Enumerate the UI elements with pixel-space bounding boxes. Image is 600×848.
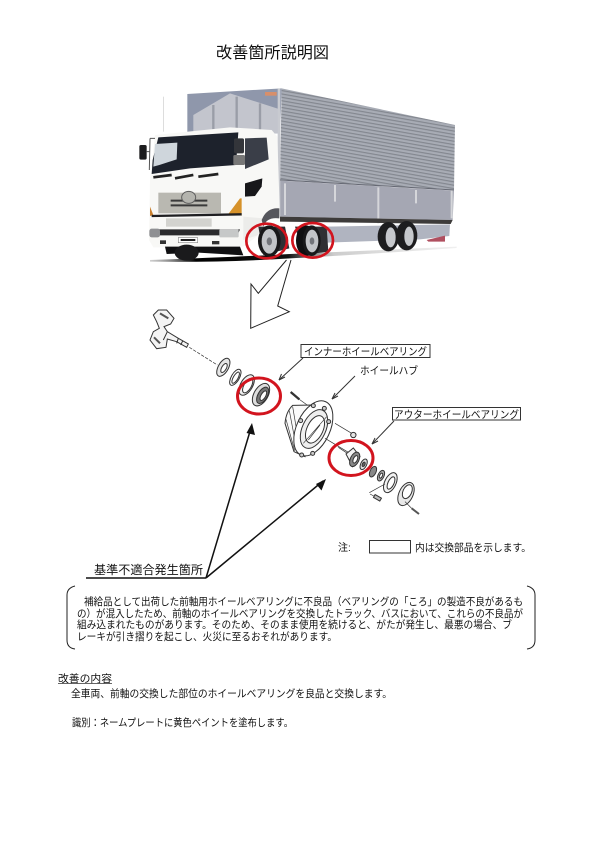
arrow: wheel hub [332, 376, 355, 399]
callout: non-conformity location [86, 423, 326, 578]
red circle: front axle 1 [246, 224, 287, 258]
explanation text: 組み込まれたものがあります。そのため、そのまま使用を続けると、がたが発生し、最悪の場合、ブ [77, 618, 512, 631]
text: identification: 識別：ネームプレートに黄色ペイントを塗布します。 [72, 716, 293, 729]
ground shadow [150, 247, 457, 262]
amber marker [228, 198, 242, 216]
label: wheel hub: ホイールハブ [360, 364, 418, 377]
note legend: 内は交換部品を示します。 [415, 541, 531, 554]
cab [139, 127, 280, 247]
explanation text: 補給品として出荷した前軸用ホイールベアリングに不良品（ベアリングの「ころ」の製造不良があるも [84, 595, 523, 608]
headlamps [149, 229, 160, 237]
exploded view: hub and outer parts [285, 392, 419, 514]
bracket: right [527, 586, 535, 649]
seal ring [227, 368, 243, 387]
door vent [245, 178, 262, 197]
inner race [236, 372, 258, 398]
note legend [338, 540, 531, 554]
windscreen [152, 132, 238, 174]
text: improvement: 全車両、前軸の交換した部位のホイールベアリングを良品と交換します。 [71, 687, 392, 700]
front lower chassis and wheel [165, 247, 243, 255]
door window [245, 138, 269, 169]
heading: improvement details: 改善の内容 [58, 672, 113, 685]
gasket [381, 471, 400, 495]
red circle: inner bearing [238, 378, 280, 414]
vents [153, 174, 218, 178]
title: 改善箇所説明図 [216, 44, 329, 62]
red circle: outer bearing [329, 440, 373, 476]
mast [162, 97, 164, 132]
cargo box side louvers [280, 88, 455, 190]
washer [359, 458, 369, 471]
stud line and nut [335, 423, 352, 433]
explanation text [77, 595, 523, 643]
arrow: outer label [372, 421, 394, 444]
cap bolt [405, 502, 412, 508]
hollow arrow from truck to diagram [251, 260, 291, 328]
red circle: front axle 2 [292, 223, 333, 258]
stud bolt [291, 392, 299, 399]
rear wheels [378, 221, 417, 251]
exploded view: knuckle and inner parts [150, 310, 273, 409]
hub flange [286, 395, 341, 462]
inner bearing [249, 380, 273, 409]
lock nuts [368, 465, 378, 478]
note legend: 注: [338, 541, 351, 554]
outer bearing [346, 448, 360, 467]
hino plate [178, 238, 198, 243]
label: inner wheel bearing: インナーホイールベアリング [304, 345, 427, 358]
arrow: inner label [279, 358, 303, 380]
label: outer wheel bearing: アウターホイールベアリング [394, 408, 519, 421]
mirror [139, 145, 147, 160]
front axle wheels [258, 225, 328, 257]
bracket: left [67, 586, 75, 649]
cap screw [369, 484, 385, 497]
hub cap [394, 480, 418, 508]
explanation text: レーキが引き摺りを起こし、火災に至るおそれがあります。 [77, 630, 337, 643]
bumper line [152, 214, 242, 216]
callout: non-conformity location: 基準不適合発生箇所 [94, 562, 203, 577]
side skirt [327, 224, 450, 243]
thrust washer [214, 356, 233, 378]
steering knuckle [150, 310, 188, 349]
chassis frame [280, 217, 453, 224]
truck photo [139, 88, 457, 262]
grille [158, 193, 221, 213]
step panel [243, 217, 263, 240]
explanation text: の）が混入したため、前軸のホイールベアリングを交換したトラック、バスにおいて、これらの不良品が [77, 607, 523, 620]
cargo box front [187, 88, 282, 133]
cargo box lower panel [280, 181, 454, 220]
hub barrel [285, 405, 313, 457]
dash axis [189, 347, 217, 365]
